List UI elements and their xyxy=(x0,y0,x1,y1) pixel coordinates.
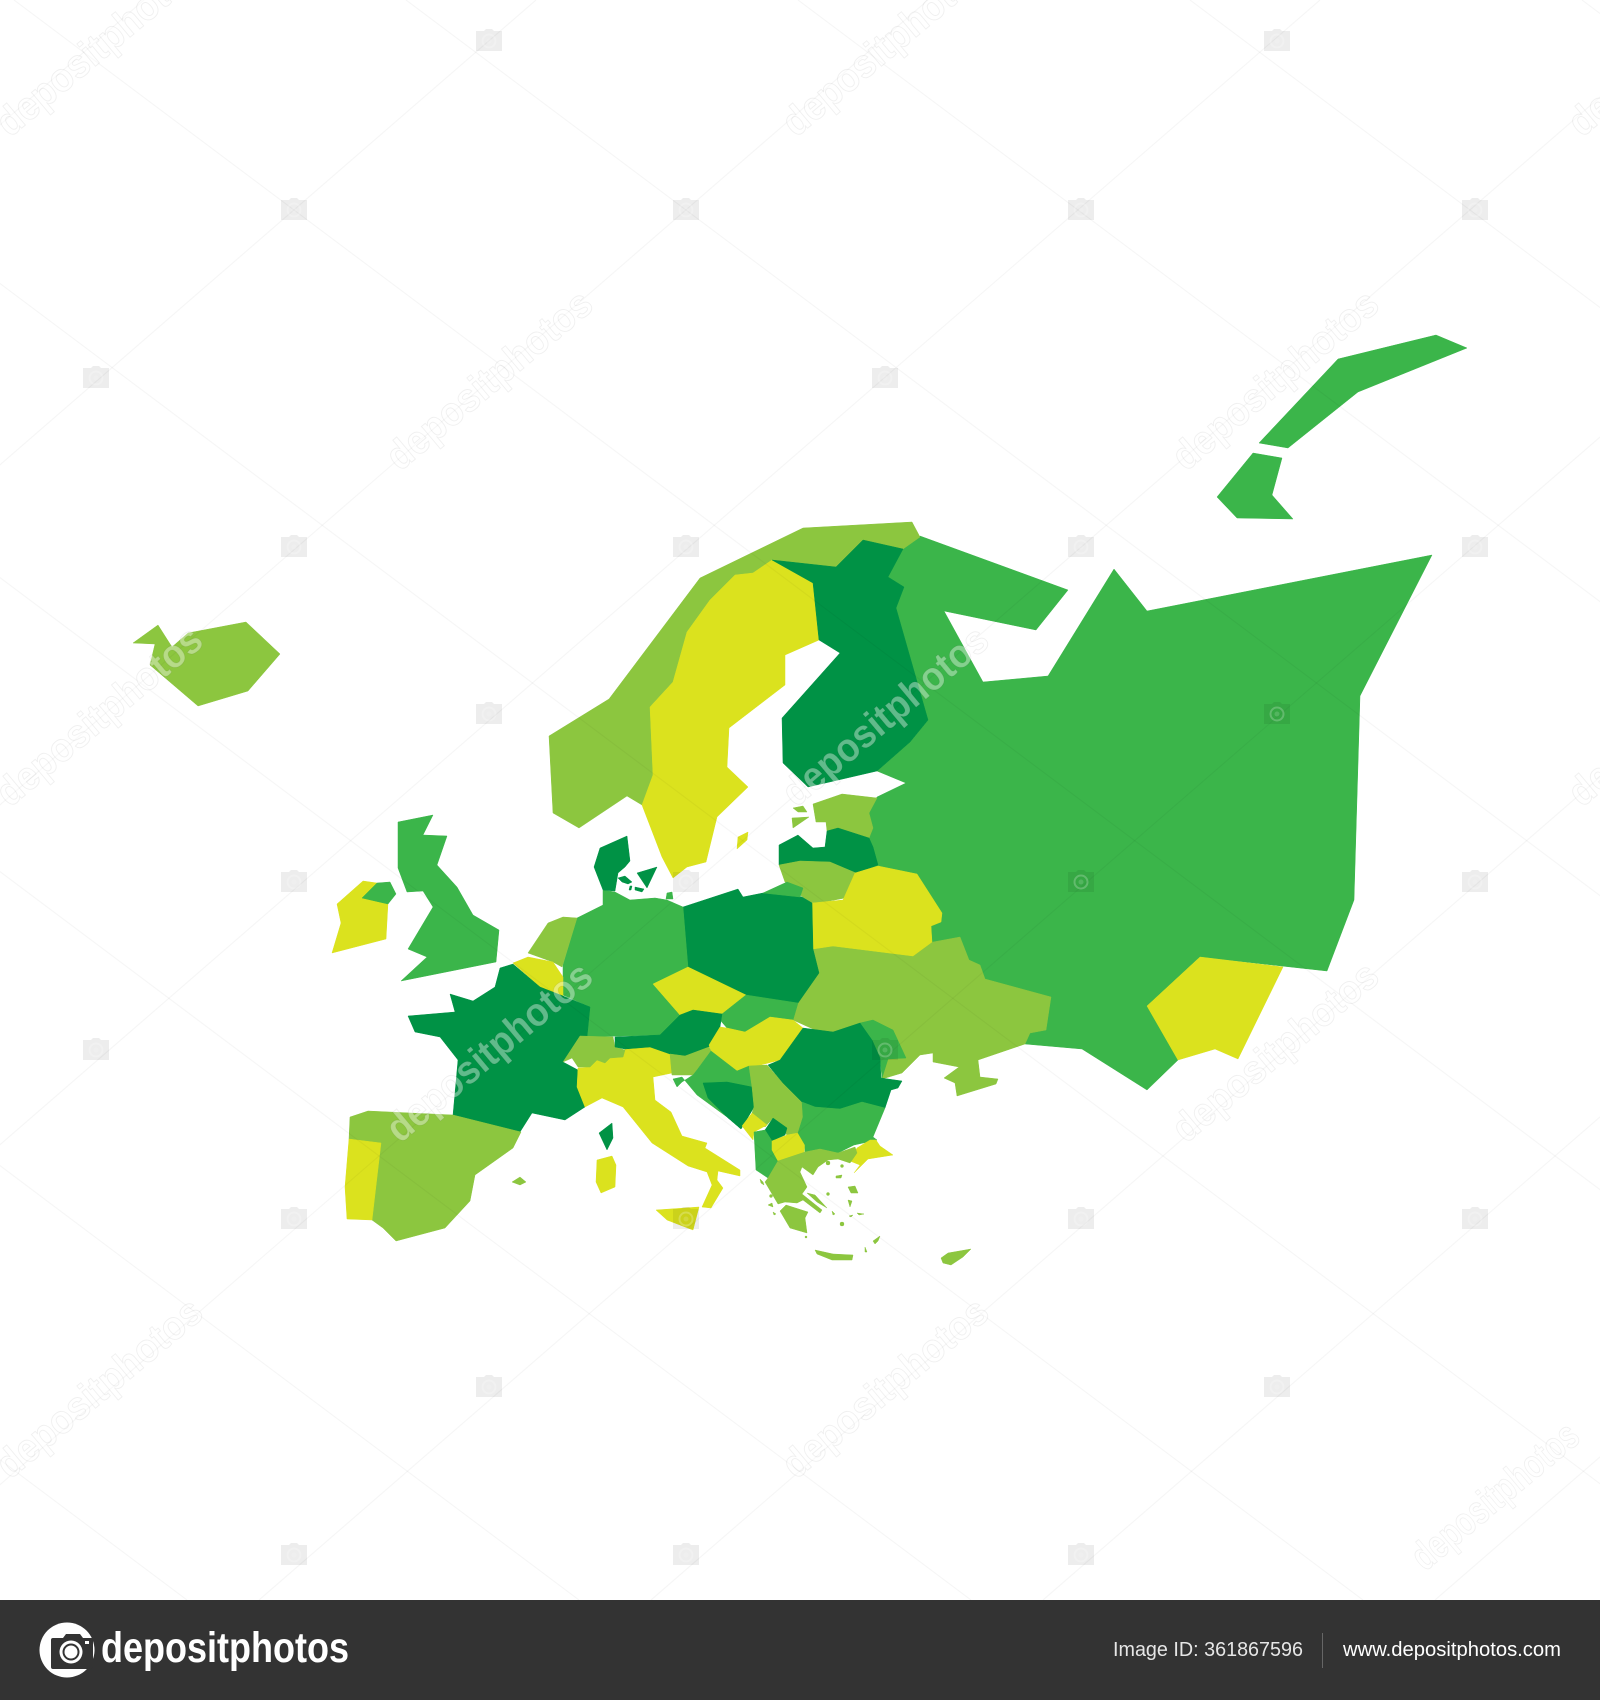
Danish island Zealand xyxy=(637,867,657,888)
North Macedonia xyxy=(772,1133,805,1161)
watermark text: depositphotos xyxy=(1164,953,1387,1151)
map of Europe xyxy=(133,335,1467,1265)
Kaliningrad xyxy=(763,882,803,897)
Kosovo xyxy=(765,1118,787,1141)
Belarus xyxy=(812,866,942,956)
Bosnia and Herzegovina xyxy=(703,1082,754,1129)
Peloponnese xyxy=(780,1205,808,1233)
Novaya Zemlya north xyxy=(1259,335,1467,448)
Euboea xyxy=(807,1193,827,1208)
Sicily xyxy=(656,1207,699,1230)
Belgium xyxy=(513,957,563,996)
Romania xyxy=(768,1023,902,1109)
Turkey Thrace xyxy=(850,1140,893,1173)
Italy xyxy=(577,1047,740,1208)
watermark text: depositphotos xyxy=(1164,281,1387,479)
Bulgaria xyxy=(798,1102,885,1153)
Hungary xyxy=(709,1017,803,1071)
Netherlands xyxy=(528,917,577,967)
Ukraine xyxy=(793,937,1051,1096)
watermark text: depositphotos xyxy=(774,1289,997,1487)
Balearic Islands xyxy=(512,1177,526,1185)
watermark text: depositphotos xyxy=(774,617,997,815)
Danish island Funen xyxy=(618,876,632,884)
website url: www.depositphotos.com xyxy=(1342,1639,1561,1661)
Estonia xyxy=(813,794,877,838)
Serbia xyxy=(749,1065,803,1135)
Albania xyxy=(754,1130,778,1178)
Croatia xyxy=(673,1051,754,1129)
Estonian island Saaremaa xyxy=(792,817,809,828)
Novaya Zemlya south xyxy=(1217,453,1293,519)
Slovenia xyxy=(670,1047,711,1075)
footer bar xyxy=(0,1600,1600,1700)
Moldova xyxy=(860,1020,906,1078)
Montenegro xyxy=(742,1113,767,1140)
Corsica xyxy=(599,1123,613,1150)
watermark text: depositphotos xyxy=(378,953,601,1151)
France xyxy=(408,964,590,1132)
logo wordmark: depositphotos xyxy=(101,1624,349,1672)
image id: Image ID: 361867596 xyxy=(1113,1639,1303,1661)
Ireland xyxy=(332,881,388,953)
Bornholm xyxy=(666,892,673,899)
divider xyxy=(1322,1633,1323,1668)
Cyprus xyxy=(941,1249,971,1265)
Czech Republic xyxy=(653,967,746,1015)
Gotland xyxy=(737,832,748,849)
Latvia xyxy=(779,828,878,873)
icon: depositphotos camera logo xyxy=(40,1622,94,1678)
Kazakhstan xyxy=(1147,957,1283,1060)
Austria xyxy=(615,1010,722,1056)
Portugal xyxy=(345,1139,381,1220)
Germany xyxy=(563,890,688,1037)
Denmark xyxy=(594,836,630,891)
Switzerland xyxy=(563,1036,625,1067)
Danish small island xyxy=(629,886,632,890)
Norway xyxy=(549,522,920,828)
Poland xyxy=(683,889,819,1003)
Crete xyxy=(815,1250,853,1260)
Estonian island Hiiumaa xyxy=(793,806,807,812)
watermark camera icons xyxy=(83,29,1488,1565)
Greece mainland xyxy=(765,1147,857,1213)
Finland xyxy=(772,540,928,787)
Spain xyxy=(349,1111,521,1241)
Lithuania xyxy=(779,861,856,904)
Northern Ireland xyxy=(362,882,396,904)
Aegean and Ionian islands xyxy=(760,1161,880,1252)
Russia xyxy=(865,536,1432,1090)
United Kingdom xyxy=(398,815,499,981)
Danish island Lolland xyxy=(635,887,644,892)
Slovakia xyxy=(720,995,798,1032)
watermark text: depositphotos xyxy=(378,281,601,479)
Sweden xyxy=(642,560,819,878)
Sardinia xyxy=(596,1156,616,1193)
Iceland xyxy=(133,622,280,706)
